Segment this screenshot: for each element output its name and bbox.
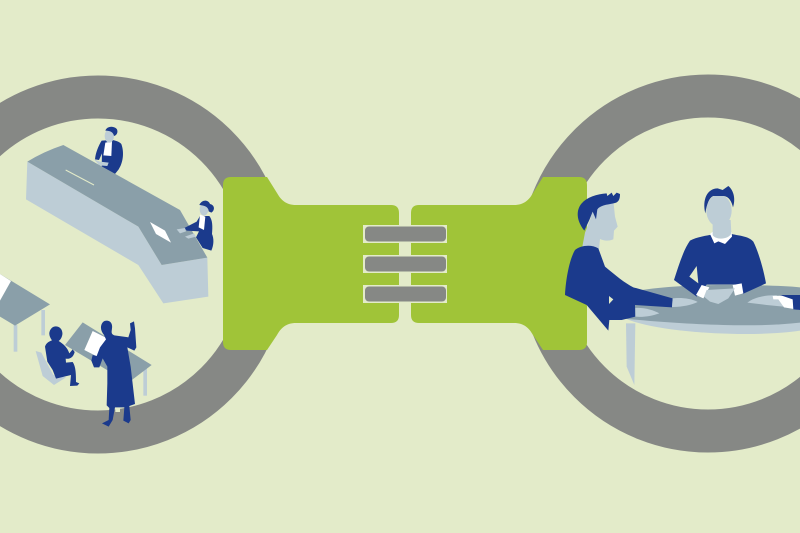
- clerk standing behind bench: [94, 127, 123, 174]
- left connector puzzle piece: [223, 177, 399, 350]
- back table: [0, 274, 50, 352]
- connector bars: [363, 225, 447, 303]
- judge bench: [26, 145, 208, 303]
- right connector puzzle piece: [411, 177, 587, 350]
- seated judge: [177, 201, 214, 251]
- middle bar: [363, 255, 447, 273]
- lawyers scene: [0, 274, 152, 427]
- left ring: [0, 97, 266, 432]
- bottom bar: [363, 285, 447, 303]
- chair: [36, 351, 66, 385]
- man seen from the side: [565, 193, 698, 331]
- round table: [609, 285, 800, 385]
- right ring: [540, 96, 800, 431]
- man on the right edge: [747, 295, 800, 310]
- seated lawyer: [45, 326, 79, 386]
- mediation scene: [565, 186, 800, 385]
- courtroom bench scene: [26, 127, 214, 303]
- top bar: [363, 225, 447, 243]
- seated man facing viewer: [674, 186, 766, 304]
- front table: [65, 322, 152, 396]
- standing lawyer in gown: [84, 321, 136, 427]
